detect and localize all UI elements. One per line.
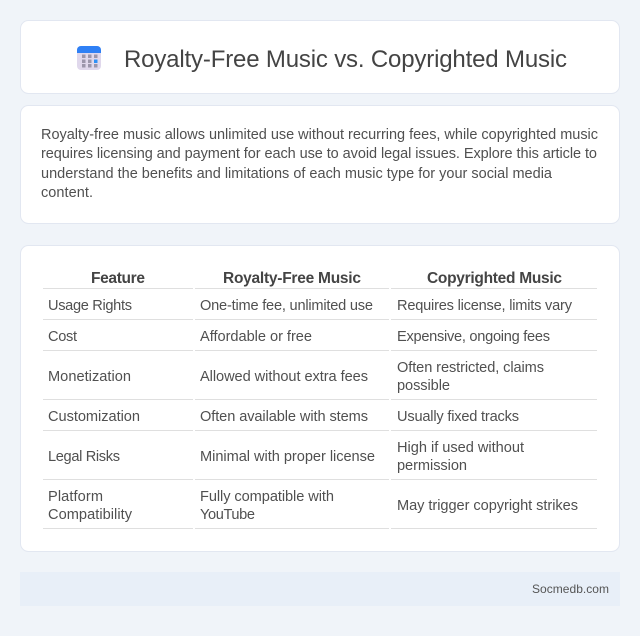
text block: introduction paragraph: Royalty-free music allows unlimited use without recurring fees, while copyrighted music [41, 127, 598, 143]
table header row: Royalty-Free Music [223, 270, 361, 287]
row: monetization: Monetization [48, 369, 131, 385]
text block: introduction paragraph: understand the benefits and limitations of each music type for your social media [41, 166, 553, 182]
row: monetization: possible [397, 378, 450, 394]
row: customization [48, 409, 519, 425]
row: usage rights [48, 298, 573, 314]
table header row [91, 270, 562, 287]
text block: introduction paragraph [41, 127, 598, 201]
row: platform compatibility: YouTube [200, 507, 255, 523]
text block: introduction paragraph: requires licensing and payment for each use to avoid legal issues. Explore this article to [41, 146, 597, 162]
row: monetization: Allowed without extra fees [200, 369, 368, 385]
table header row: Feature [91, 270, 145, 287]
row: monetization [48, 360, 544, 394]
row: platform compatibility: May trigger copyright strikes [397, 498, 578, 514]
panel: introduction [20, 106, 620, 224]
row: monetization: Often restricted, claims [397, 360, 544, 376]
row: usage rights: Requires license, limits vary [397, 298, 573, 314]
panel: comparison table [20, 246, 620, 552]
row: platform compatibility: Platform [48, 489, 103, 505]
row: cost: Cost [48, 329, 77, 345]
row: platform compatibility: Fully compatible with [200, 489, 334, 505]
row: usage rights: Usage Rights [48, 298, 132, 314]
footer [20, 572, 620, 606]
row: usage rights: One-time fee, unlimited use [200, 298, 373, 314]
panel: title card [20, 20, 620, 94]
title: Royalty-Free Music vs. Copyrighted Music [124, 46, 567, 73]
text block: introduction paragraph: content. [41, 185, 93, 201]
table header row: Copyrighted Music [427, 270, 562, 287]
footer credit: Socmedb.com [532, 582, 609, 596]
row: customization: Usually fixed tracks [397, 409, 519, 425]
row: legal risks [48, 440, 524, 474]
row: legal risks: High if used without [397, 440, 524, 456]
row: platform compatibility [48, 489, 578, 523]
row: legal risks: Minimal with proper license [200, 449, 375, 465]
row: legal risks: Legal Risks [48, 449, 120, 465]
row: cost: Affordable or free [200, 329, 312, 345]
row: cost [48, 329, 550, 345]
row: cost: Expensive, ongoing fees [397, 329, 550, 345]
row: platform compatibility: Compatibility [48, 507, 133, 523]
row: customization: Customization [48, 409, 140, 425]
icon: calendar [77, 46, 101, 70]
row: customization: Often available with stems [200, 409, 368, 425]
row: legal risks: permission [397, 458, 467, 474]
